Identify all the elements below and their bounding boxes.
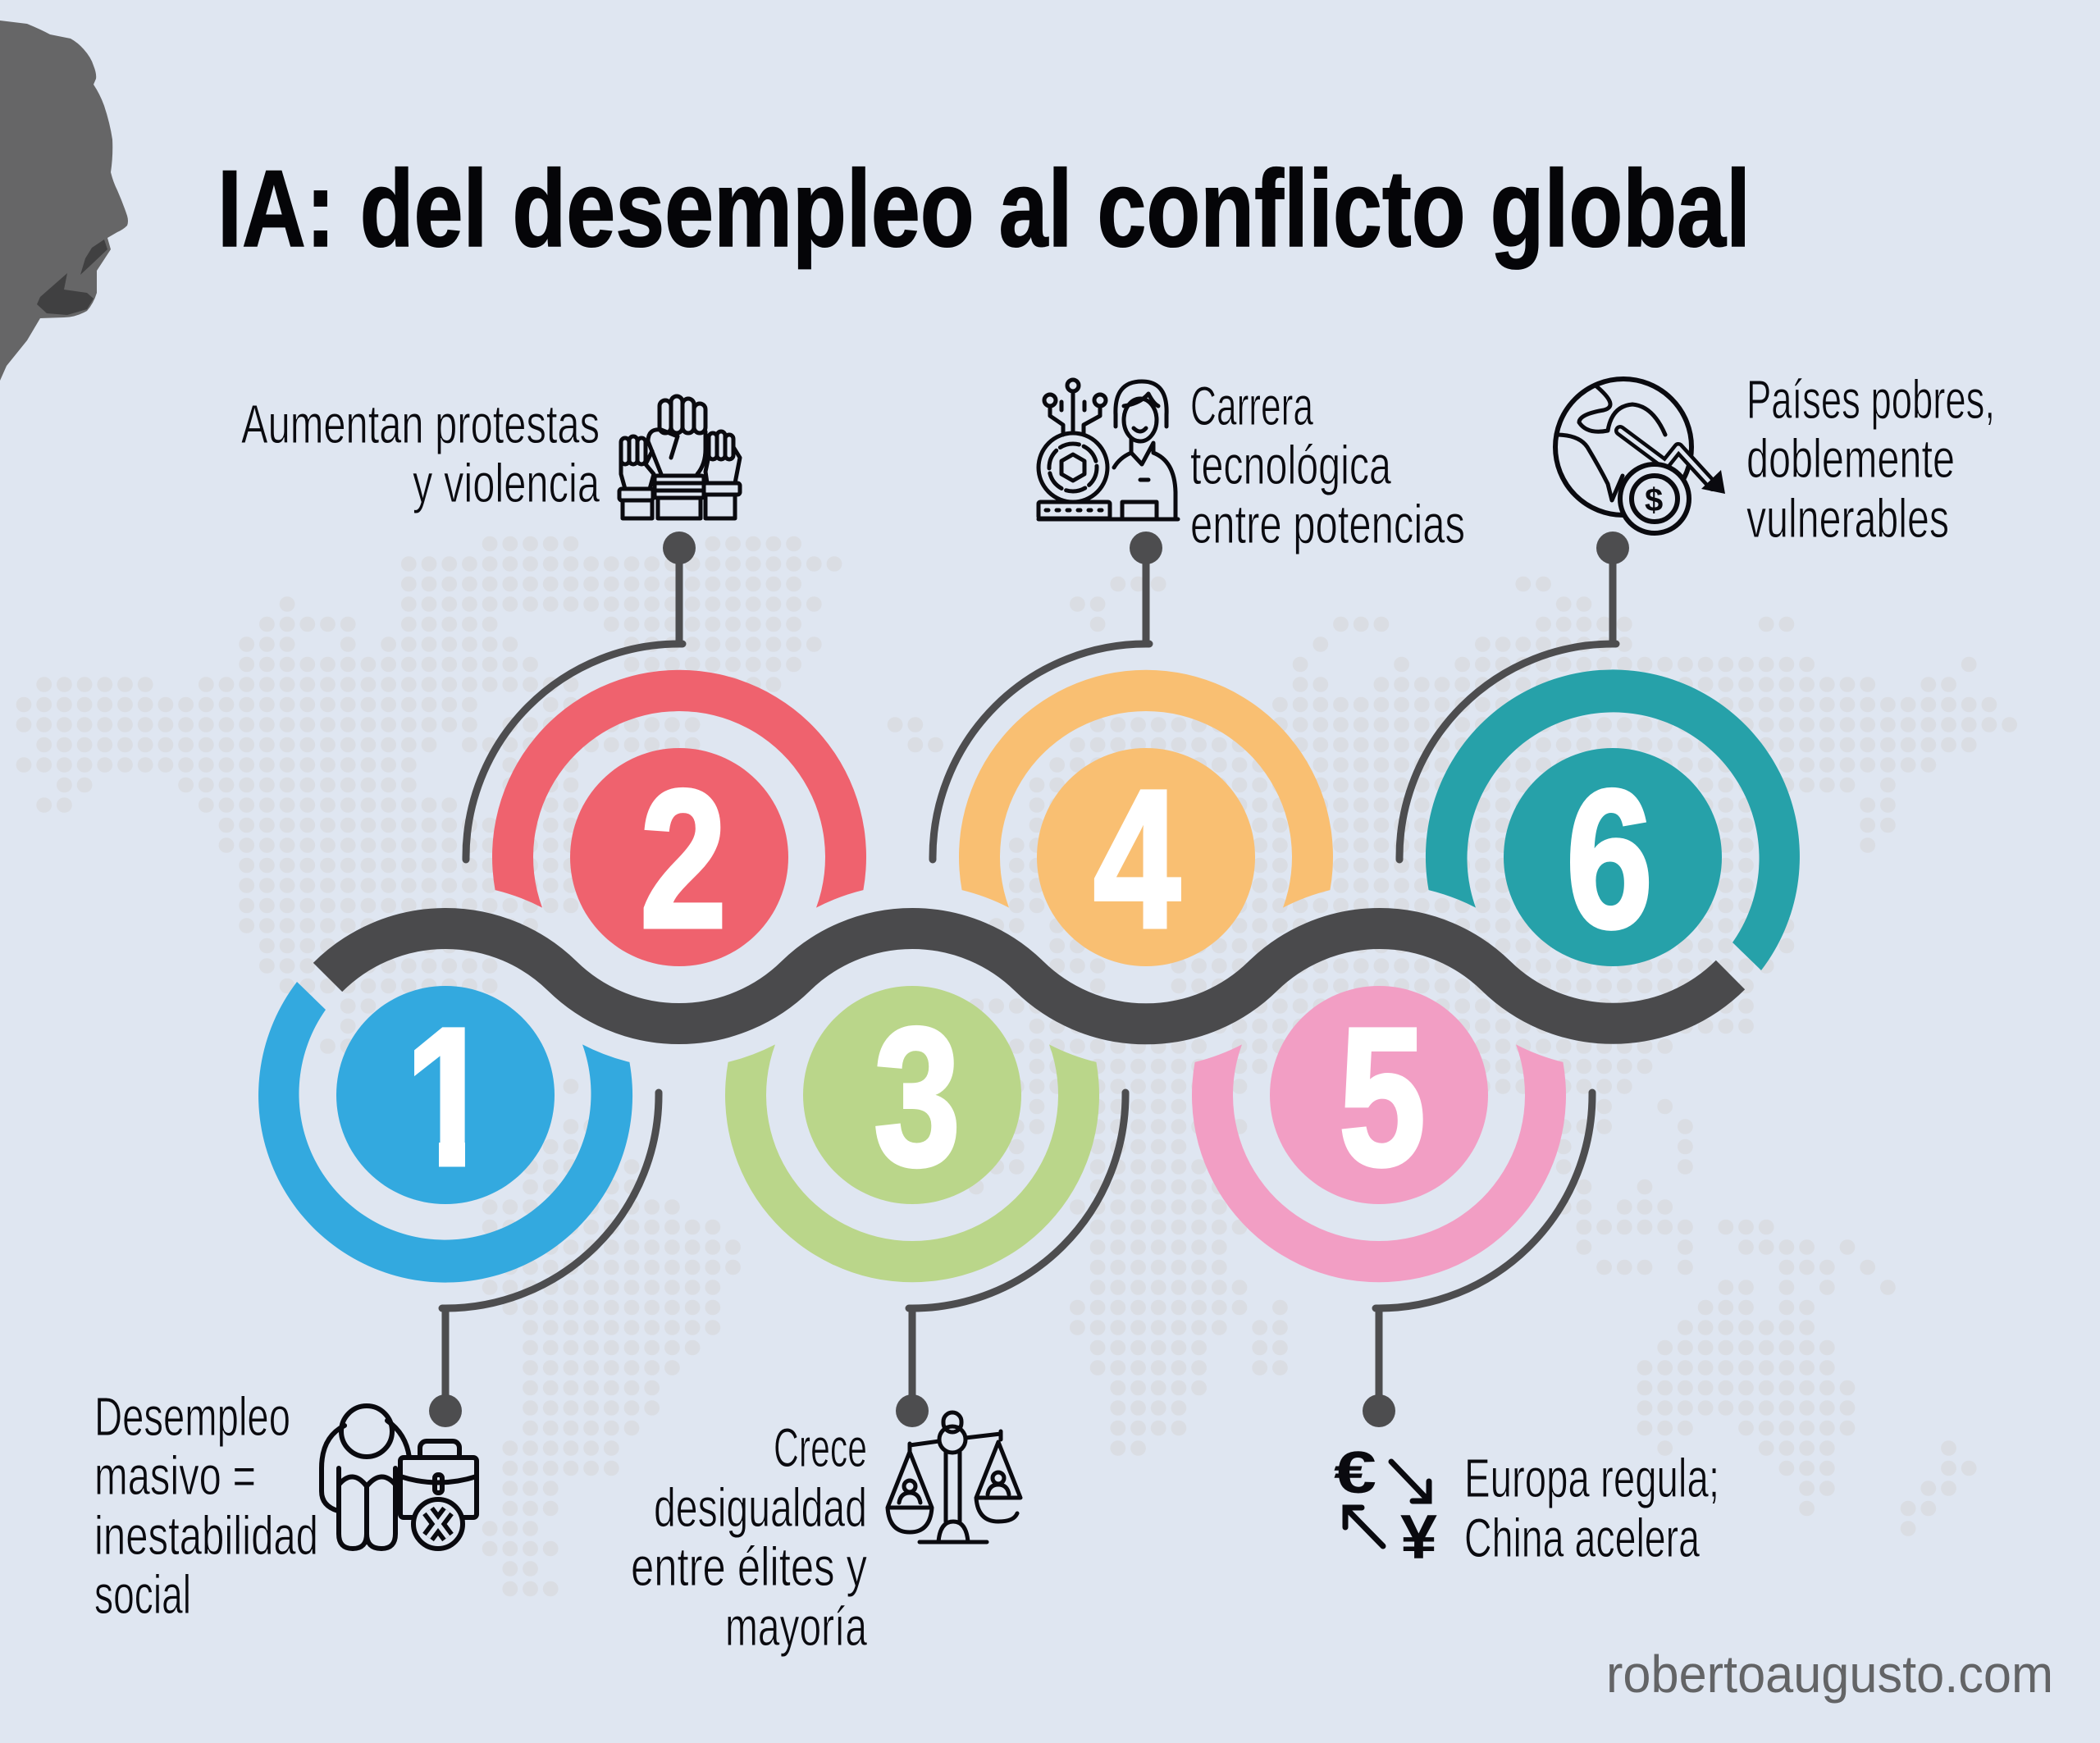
text: step 4: entre potencias [1190,494,1465,555]
step 2 badge: red ring and number: 2 [640,749,727,969]
step 4 badge: orange ring and number [959,670,1333,969]
connector line: step 4 [933,532,1162,860]
icon: euro yuan exchange: ¥ [1400,1503,1437,1572]
text: step 1: social [94,1564,191,1626]
text: step 5: Europa regula; [1464,1448,1719,1509]
icon: globe with falling dollar: $ [1645,482,1663,518]
text: step 2: y violencia [413,453,600,514]
icon: balance scales [888,1412,1020,1542]
icon: euro yuan exchange: € [1334,1440,1376,1506]
text: step 6 [1746,369,1995,550]
text: step 3 [631,1417,868,1658]
title: IA: del desempleo al conflicto global [217,148,1751,270]
step 3 badge: green ring and number [725,986,1099,1282]
step 6 badge: teal ring and number [1426,669,1800,970]
text: step 5 [1464,1448,1719,1569]
icon: unemployed person and briefcase [322,1406,477,1549]
central wave connector [328,929,1731,1024]
text: step 1: inestabilidad [94,1505,318,1567]
step 3 badge: green ring and number: 3 [874,987,961,1207]
text: step 3: desigualdad [654,1477,867,1539]
text: step 3: entre élites y [631,1536,867,1598]
text: step 4: Carrera [1190,376,1313,437]
text: step 4: tecnológica [1190,435,1392,496]
text: step 4 [1190,376,1465,555]
step 4 badge: orange ring and number: 4 [1093,749,1180,969]
text: step 2: Aumentan protestas [241,394,600,455]
dotted world map background [24,544,2010,1589]
text: step 5: China acelera [1464,1508,1701,1569]
connector line: step 2 [466,532,696,860]
step 5 badge: pink ring and number: 5 [1339,987,1426,1207]
text: step 2 [241,394,600,514]
text: step 6: vulnerables [1746,488,1949,550]
connector line: step 5 [1363,1093,1592,1427]
icon: euro yuan exchange [1334,1440,1437,1572]
icon: technology race [1039,380,1178,519]
connector line: step 6 [1399,532,1629,860]
connector line: step 3 [896,1093,1125,1427]
text: step 1: Desempleo [94,1386,290,1448]
text: step 6: doblemente [1746,428,1955,490]
text: step 1: masivo = [94,1445,256,1507]
step 2 badge: red ring and number [492,670,866,969]
portrait silhouette [0,21,128,381]
text: step 3: Crece [774,1417,867,1479]
connector line: step 1 [429,1093,659,1427]
icon: globe with falling dollar [1555,379,1725,533]
step 5 badge: pink ring and number [1192,986,1566,1282]
icon: raised fists [619,396,740,518]
step 1 badge: blue ring and number: 1 [405,987,492,1207]
step 6 badge: teal ring and number: 6 [1566,749,1653,969]
step 1 badge: blue ring and number [258,982,632,1283]
text: step 3: mayoría [725,1596,868,1658]
text: step 1 [94,1386,318,1626]
website credit: robertoaugusto.com [1606,1645,2053,1704]
